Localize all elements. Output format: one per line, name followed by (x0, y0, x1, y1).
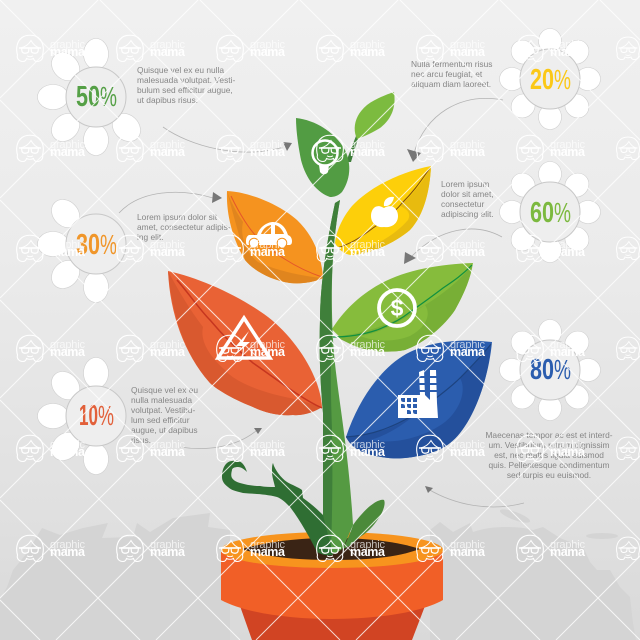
text block: 10%: volutpat. Vestibu- (131, 405, 195, 415)
watermark: graphic mama repeated logo: graphic (250, 239, 286, 251)
watermark: graphic mama repeated logo: mama (150, 345, 186, 359)
flower: 50%: 50 (76, 81, 100, 113)
text block: 30%: amet, consectetur adipis- (137, 222, 231, 232)
icon: warning triangle (218, 318, 270, 358)
flower: 30% (38, 194, 126, 302)
watermark: graphic mama repeated logo: mama (50, 445, 86, 459)
text block: 50%: Quisque vel ex eu nulla (137, 65, 224, 75)
watermark: graphic mama repeated logo: mama (350, 45, 386, 59)
text block: 60%: Lorem ipsum (441, 179, 489, 189)
icon: apple (371, 197, 398, 227)
leaf: green with bulb icon (296, 118, 349, 197)
watermark: graphic mama repeated logo: mama (50, 545, 86, 559)
watermark: graphic mama repeated logo: mama (450, 145, 486, 159)
leaf: light green with dollar icon (332, 263, 473, 352)
background foliage silhouettes (0, 507, 636, 640)
watermark: graphic mama repeated logo: mama (350, 445, 386, 459)
watermark: graphic mama repeated logo: graphic (50, 39, 86, 51)
text block: 10%: nulla malesuada (131, 395, 192, 405)
text block: 50%: bulum sed efficitur augue, (137, 85, 233, 95)
watermark: graphic mama repeated logo: mama (150, 545, 186, 559)
text block: 80%: est, nec mattis ligula euismod (494, 450, 604, 460)
watermark: graphic mama repeated logo: graphic (350, 139, 386, 151)
twig: small leaf stalk (346, 132, 360, 162)
watermark: graphic mama repeated logo: graphic (250, 139, 286, 151)
watermark: graphic mama repeated logo: graphic (450, 139, 486, 151)
leaf: small light green (355, 92, 395, 139)
watermark: graphic mama repeated logo: graphic (50, 139, 86, 151)
flower: 10% (38, 358, 126, 474)
watermark: graphic mama repeated logo: mama (250, 245, 286, 259)
flower: 60%: % (554, 197, 571, 228)
arrow: 50% to green leaf (163, 127, 292, 152)
pot lower body (240, 606, 425, 640)
watermark: graphic mama repeated logo: graphic (450, 39, 486, 51)
watermark: graphic mama repeated logo: mama (350, 545, 386, 559)
watermark: graphic mama repeated logo: graphic (150, 39, 186, 51)
watermark: graphic mama repeated logo: mama (350, 245, 386, 259)
watermark: graphic mama repeated logo: mama (550, 545, 586, 559)
watermark: graphic mama repeated logo: graphic (150, 139, 186, 151)
watermark: graphic mama repeated logo: mama (550, 45, 586, 59)
text block: 30%: ing elit. (137, 232, 164, 242)
watermark: graphic mama repeated logo: graphic (150, 239, 186, 251)
watermark: graphic mama repeated logo: graphic (550, 39, 586, 51)
watermark: graphic mama repeated logo: graphic (250, 339, 286, 351)
watermark: graphic mama repeated logo: graphic (150, 339, 186, 351)
flower: 50%: % (100, 81, 117, 112)
flower: 80% (500, 320, 600, 420)
icon: car (246, 222, 292, 248)
flower: 10%: 10 (79, 400, 98, 432)
arrow: 30% to orange leaf (119, 192, 222, 213)
text block: 10%: lum sed efficitur (131, 415, 190, 425)
watermark: graphic mama repeated logo: graphic (50, 539, 86, 551)
watermark: graphic mama repeated logo: graphic (550, 239, 586, 251)
watermark: graphic mama repeated logo: graphic (550, 539, 586, 551)
watermark: graphic mama repeated logo: mama (50, 45, 86, 59)
flower: 30%: 30 (76, 229, 100, 261)
watermark: graphic mama repeated logo: mama (250, 445, 286, 459)
watermark: graphic mama repeated logo: graphic (50, 339, 86, 351)
flower: 60%: 60 (530, 197, 554, 229)
watermark: graphic mama repeated logo: mama (450, 345, 486, 359)
watermark: graphic mama repeated logo: graphic (250, 539, 286, 551)
watermark: graphic mama repeated logo: graphic (50, 239, 86, 251)
arrow: 60% to light green leaf (404, 229, 502, 264)
flower: 80%: 80 (530, 354, 554, 386)
watermark: graphic mama repeated logo: mama (550, 345, 586, 359)
watermark: graphic mama repeated logo: mama (450, 445, 486, 459)
watermark: graphic mama repeated logo: mama (450, 245, 486, 259)
watermark: graphic mama repeated logo: mama (450, 545, 486, 559)
leaf: yellow with apple icon (335, 166, 431, 255)
watermark: graphic mama repeated logo: mama (50, 245, 86, 259)
arrow: 80% to blue leaf (425, 486, 524, 507)
watermark: graphic mama repeated logo: mama (150, 445, 186, 459)
watermark: graphic mama repeated logo: graphic (150, 539, 186, 551)
icon: light bulb (312, 140, 338, 174)
watermark: graphic mama repeated logo: mama (250, 45, 286, 59)
pot band (221, 552, 443, 619)
watermark: graphic mama repeated logo: graphic (150, 439, 186, 451)
watermark: graphic mama repeated logo: graphic (450, 239, 486, 251)
soil (242, 538, 420, 560)
flower: 10%: % (98, 400, 114, 431)
watermark: graphic mama repeated logo: mama (450, 45, 486, 59)
text block: 10%: Quisque vel ex eu (131, 385, 198, 395)
flower: 80%: % (554, 354, 571, 385)
flower: 30%: % (100, 229, 117, 260)
watermark: graphic mama repeated logo: mama (50, 145, 86, 159)
watermark: graphic mama repeated logo: mama (50, 345, 86, 359)
arrow: 20% to yellow leaf (407, 98, 503, 162)
watermark: graphic mama repeated logo: graphic (350, 339, 386, 351)
arrow: 10% to red leaf (180, 428, 262, 449)
text block: 50%: ut dapibus risus. (137, 95, 198, 105)
watermark: graphic mama repeated logo: mama (350, 345, 386, 359)
text block: 10%: augue, ut dapibus (131, 425, 198, 435)
watermark: graphic mama repeated logo: mama (250, 345, 286, 359)
flower: 20%: 20 (530, 64, 554, 96)
pot rim (221, 532, 443, 568)
text block: 80%: Maecenas tempor ac est et interd- (485, 430, 613, 440)
watermark: graphic mama repeated logo: graphic (350, 439, 386, 451)
watermark: graphic mama repeated logo: graphic (450, 339, 486, 351)
flower: 20%: % (554, 64, 571, 95)
text block: 20%: aliquam diam laoreet. (411, 79, 491, 89)
watermark: graphic mama repeated logo: mama (550, 245, 586, 259)
watermark: graphic mama repeated logo: mama (250, 145, 286, 159)
watermark: graphic mama repeated logo: graphic (250, 39, 286, 51)
plant stem (317, 200, 353, 555)
text block: 80%: um. Vestibulum rutrum dignissim (488, 440, 610, 450)
branch: curled tendril (222, 461, 333, 555)
watermark: graphic mama repeated logo: graphic (550, 439, 586, 451)
icon: dollar coin: $ (391, 295, 404, 321)
leaf: red with warning icon (168, 271, 322, 415)
watermark: graphic mama repeated logo: graphic (450, 539, 486, 551)
watermark: graphic mama repeated logo: mama (550, 145, 586, 159)
watermark: graphic mama repeated logo: mama (350, 145, 386, 159)
flower pot (221, 532, 443, 640)
watermark: graphic mama repeated logo: graphic (550, 339, 586, 351)
watermark: graphic mama repeated logo: graphic (50, 439, 86, 451)
flower: 50% (38, 38, 146, 156)
text block: 20%: nec arcu feugiat, et (411, 69, 483, 79)
watermark: graphic mama repeated logo: mama (150, 145, 186, 159)
text block: 20%: Nulla fermentum risus (411, 59, 492, 69)
icon: factory (398, 370, 438, 418)
text block: 60%: consectetur (441, 199, 485, 209)
flower: 20% (500, 28, 600, 130)
text block: 50%: malesuada volutpat. Vesti- (137, 75, 235, 85)
watermark: graphic mama repeated logo: mama (250, 545, 286, 559)
text block: 60%: adipiscing elit. (441, 209, 494, 219)
icon: dollar coin (379, 290, 415, 326)
leaf: orange with car icon (227, 191, 323, 283)
watermark: graphic mama repeated logo: mama (150, 245, 186, 259)
text block: 10%: risus. (131, 435, 151, 445)
flower: 60% (500, 162, 600, 262)
leaf: blue with factory icon (346, 341, 492, 458)
text block: 80%: sed turpis eu euismod. (507, 470, 591, 480)
text block: 80%: quis. Pellentesque condimentum (488, 460, 610, 470)
watermark: graphic mama repeated logo: graphic (550, 139, 586, 151)
text block: 60%: dolor sit amet, (441, 189, 494, 199)
watermark: graphic mama repeated logo: graphic (350, 239, 386, 251)
text block: 30%: Lorem ipsum dolor sit (137, 212, 218, 222)
watermark: graphic mama repeated logo: graphic (450, 439, 486, 451)
watermark: graphic mama repeated logo: mama (550, 445, 586, 459)
watermark: graphic mama repeated logo: mama (150, 45, 186, 59)
watermark: graphic mama repeated logo: graphic (350, 39, 386, 51)
branch: small right leaf (343, 500, 385, 549)
watermark: graphic mama repeated logo: graphic (350, 539, 386, 551)
watermark: graphic mama repeated logo: graphic (250, 439, 286, 451)
